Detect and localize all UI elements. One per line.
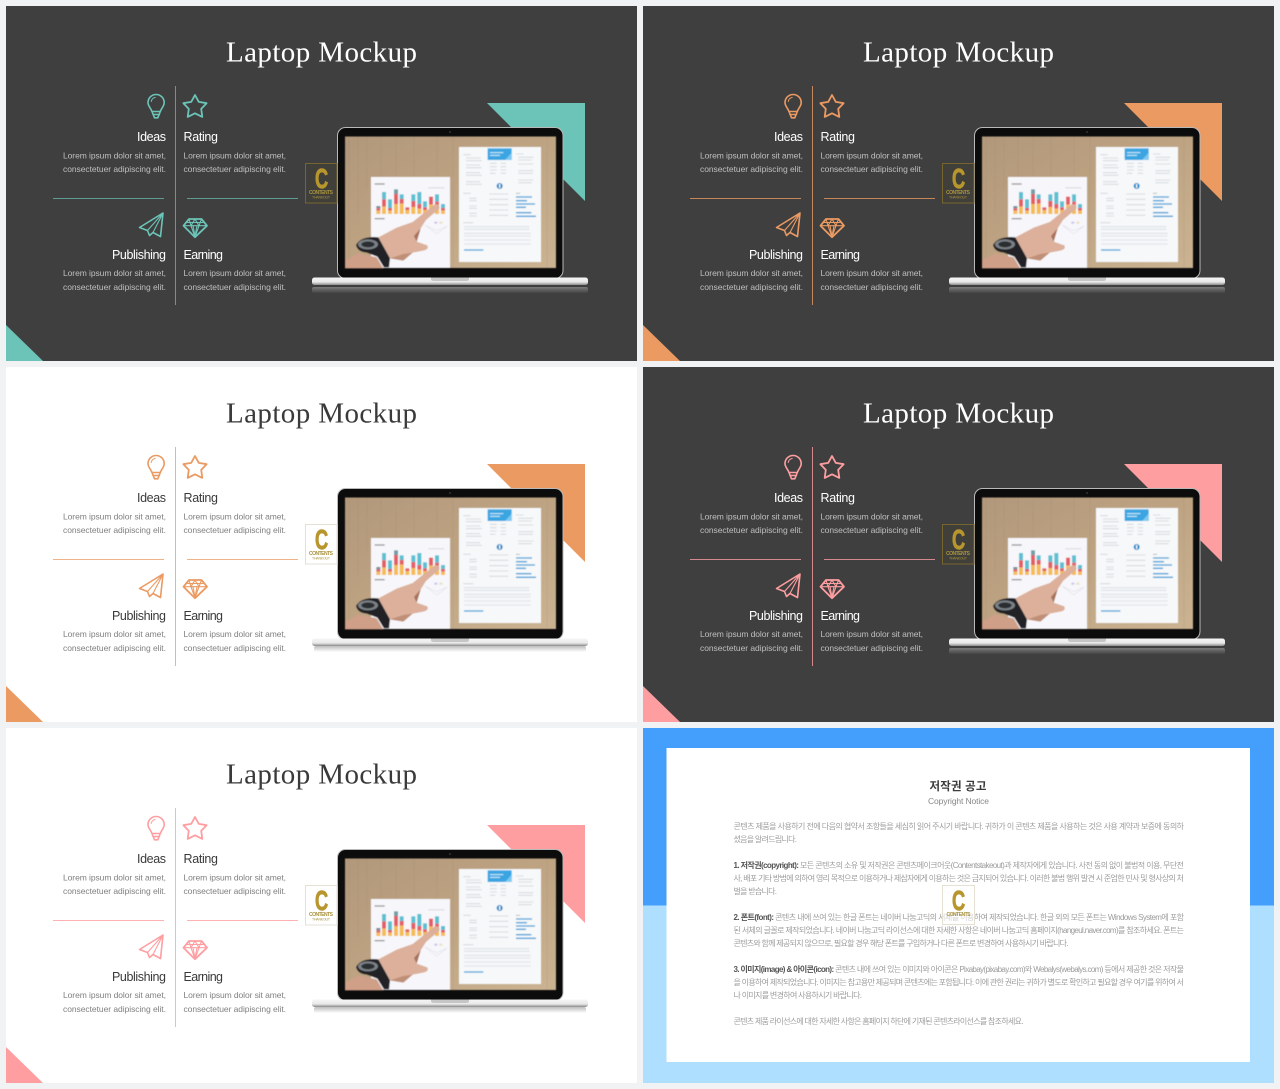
- icon: paper plane: [140, 574, 163, 598]
- notice section 3: image and icon: [734, 964, 1184, 1000]
- icon: star: [183, 456, 207, 478]
- logo badge: C: [952, 525, 965, 556]
- notice intro: 콘텐츠 제품을 사용하기 전에 다음의 협약서 조항들을 세심히 읽어 주시기 바랍니다. 귀하가 이 콘텐츠 제품을 사용하는 것은 사용 계약과 보증에 동의하: [734, 821, 1185, 831]
- logo badge: C: [952, 164, 965, 195]
- text block: Publishing: Lorem ipsum dolor sit amet,: [63, 268, 166, 278]
- title: Laptop Mockup: [226, 758, 417, 790]
- text block: Publishing: Publishing: [112, 970, 166, 984]
- panel: copyright notice slide: [643, 728, 1274, 1083]
- background triangle: [1124, 464, 1222, 562]
- notice closing line: 콘텐츠 제품 라이선스에 대한 자세한 사항은 홈페이지 하단에 기재된 콘텐츠라이선스를 참조하세요.: [734, 1016, 1024, 1026]
- text block: Ideas: [700, 130, 803, 174]
- logo badge: [942, 886, 974, 924]
- text block: Ideas: [700, 491, 803, 535]
- text block: Publishing: Lorem ipsum dolor sit amet,: [63, 629, 166, 639]
- text block: Publishing: [63, 970, 166, 1014]
- text block: Earning: [184, 609, 286, 653]
- text block: Publishing: Publishing: [112, 609, 166, 623]
- text block: Earning: consectetuer adipiscing elit.: [820, 282, 923, 292]
- text block: Rating: Rating: [820, 130, 855, 144]
- laptop with photo of charts and documents: [949, 488, 1225, 646]
- logo badge: CONTENTS: [946, 551, 971, 557]
- text block: Rating: [184, 852, 286, 896]
- text block: Publishing: [63, 248, 166, 292]
- text block: Ideas: Ideas: [774, 130, 803, 144]
- logo badge: THANKOUT: [949, 556, 968, 560]
- logo badge: THANKOUT: [312, 918, 331, 922]
- corner triangle: [6, 325, 43, 361]
- logo badge: [942, 164, 974, 203]
- icon: light bulb: [148, 94, 164, 118]
- divider lines: [690, 447, 935, 666]
- panel: laptop mockup slide, pink on white: [6, 728, 637, 1083]
- text block: Ideas: Lorem ipsum dolor sit amet,: [63, 872, 166, 882]
- icon: paper plane: [140, 213, 163, 236]
- notice section 2: font: [734, 912, 1185, 948]
- laptop with photo of charts and documents: [312, 128, 588, 285]
- logo badge: THANKOUT: [312, 196, 331, 200]
- logo badge: CONTENTS: [309, 190, 334, 196]
- title: Laptop Mockup: [863, 36, 1054, 68]
- notice subheading: Copyright Notice: [928, 796, 989, 806]
- notice section 1: copyright: 사, 배포 기타 방법에 의하여 영리 목적으로 이용하거나 제삼자에게 이용하는 것은 금지되어 있습니다. 이러한 불법 행위 발견 시 준엄한 민사 및 형사상의 처: [734, 873, 1184, 883]
- text block: Ideas: Ideas: [137, 491, 166, 505]
- logo badge: [306, 524, 337, 564]
- panel: laptop mockup slide, orange on dark: [643, 6, 1274, 361]
- text block: Earning: [184, 970, 286, 1014]
- corner triangle: [643, 686, 680, 722]
- text block: Earning: [184, 248, 286, 292]
- notice section 2: font: 콘텐츠와 함께 제공되지 않으므로, 필요할 경우 해당 폰트를 구입하거나 다른 폰트로 변경하여 사용하시기 바랍니다.: [734, 938, 1068, 948]
- text block: Publishing: consectetuer adipiscing elit.: [700, 643, 803, 653]
- icon: diamond: [184, 580, 207, 598]
- text block: Publishing: Publishing: [749, 609, 803, 623]
- notice section 1: copyright: 1. 저작권(copyright): 모든 콘텐츠의 소유 및 저작권은 콘텐츠메이크어웃(Contentstakeout)과 제작자에게 있습니다. 사전 동의 없이 불법적 이용, 무단전: [734, 860, 1184, 870]
- notice intro: 셨음을 알려드립니다.: [734, 834, 797, 844]
- text block: Rating: [184, 130, 286, 174]
- laptop reflection: [312, 287, 588, 293]
- text block: Ideas: [63, 130, 166, 174]
- text block: Rating: Lorem ipsum dolor sit amet,: [820, 150, 923, 160]
- laptop shadow: [314, 1007, 586, 1013]
- corner triangle: [6, 1047, 43, 1083]
- divider lines: [53, 86, 298, 305]
- icon: star: [183, 817, 207, 839]
- text block: Ideas: consectetuer adipiscing elit.: [700, 164, 803, 174]
- notice section 3: image and icon: 3. 이미지(image) & 아이콘(icon): 콘텐츠 내에 쓰여 있는 이미지와 아이콘은 Pixabay(pixabay.com)와 Webalys(webalys.com) 등에서 제공한 것은 저작물: [734, 964, 1184, 974]
- text block: Ideas: Lorem ipsum dolor sit amet,: [700, 150, 803, 160]
- text block: Earning: consectetuer adipiscing elit.: [184, 643, 286, 653]
- logo badge: [942, 524, 974, 564]
- text block: Earning: Earning: [184, 609, 223, 623]
- notice section 3: image and icon: 을 이용하여 제작되었습니다. 이미지는 참고용만 제공되며 콘텐츠에는 포함됩니다. 이에 관한 권리는 귀하가 별도로 확인하고 필요할 경우 여기를 위하여 서: [734, 977, 1184, 987]
- text block: Publishing: consectetuer adipiscing elit.: [63, 282, 166, 292]
- text block: Ideas: consectetuer adipiscing elit.: [700, 525, 803, 535]
- laptop reflection: [949, 648, 1225, 654]
- logo badge: C: [315, 886, 328, 917]
- text block: Rating: [184, 491, 286, 535]
- text block: Ideas: Ideas: [137, 852, 166, 866]
- icon: light bulb: [785, 94, 801, 118]
- text block: Rating: Rating: [820, 491, 855, 505]
- text block: Publishing: [700, 609, 803, 653]
- white notice card: [666, 748, 1250, 1062]
- notice section 2: font: 2. 폰트(font): 콘텐츠 내에 쓰여 있는 한글 폰트는 네이버 나눔고딕의 서체를 이용하여 제작되었습니다. 한글 외의 모든 폰트는 Windows System에 포함: [734, 912, 1185, 922]
- text block: Rating: [820, 491, 923, 535]
- text block: Publishing: Lorem ipsum dolor sit amet,: [63, 990, 166, 1000]
- text block: Earning: [820, 609, 923, 653]
- text block: Earning: [820, 248, 923, 292]
- text block: Earning: Lorem ipsum dolor sit amet,: [184, 990, 286, 1000]
- text block: Publishing: Publishing: [749, 248, 803, 262]
- text block: Rating: Lorem ipsum dolor sit amet,: [184, 512, 286, 522]
- logo badge: [306, 886, 337, 925]
- blue upper band: [643, 728, 1274, 906]
- text block: Rating: Lorem ipsum dolor sit amet,: [184, 150, 286, 160]
- background triangle: [487, 103, 585, 201]
- text block: Ideas: consectetuer adipiscing elit.: [63, 164, 166, 174]
- icon: diamond: [184, 941, 207, 959]
- notice intro: [734, 821, 1185, 844]
- text block: Earning: consectetuer adipiscing elit.: [184, 282, 286, 292]
- text block: Rating: consectetuer adipiscing elit.: [184, 164, 286, 174]
- panel: laptop mockup slide, teal on dark: [6, 6, 637, 361]
- text block: Publishing: consectetuer adipiscing elit.: [700, 282, 803, 292]
- text block: Rating: consectetuer adipiscing elit.: [820, 164, 923, 174]
- text block: Ideas: Lorem ipsum dolor sit amet,: [63, 512, 166, 522]
- text block: Rating: Rating: [184, 130, 218, 144]
- divider lines: [53, 447, 298, 666]
- laptop with photo of charts and documents: [312, 488, 588, 646]
- corner triangle: [643, 325, 680, 361]
- logo badge: CONTENTS: [309, 912, 334, 918]
- icon: paper plane: [776, 213, 800, 236]
- icon: diamond: [184, 219, 207, 237]
- text block: Rating: consectetuer adipiscing elit.: [184, 886, 286, 896]
- text block: Earning: Lorem ipsum dolor sit amet,: [184, 629, 286, 639]
- corner triangle: [6, 686, 43, 722]
- text block: Earning: consectetuer adipiscing elit.: [820, 643, 923, 653]
- notice section 3: image and icon: 나 이미지를 변경하여 사용하시기 바랍니다.: [734, 990, 862, 1000]
- text block: Publishing: consectetuer adipiscing elit.: [63, 643, 166, 653]
- text block: Earning: Earning: [184, 970, 223, 984]
- panel: laptop mockup slide, orange on white: [6, 367, 637, 722]
- text block: Ideas: Ideas: [137, 130, 166, 144]
- icon: diamond: [820, 219, 844, 237]
- logo badge: THANKOUT: [949, 196, 968, 200]
- text block: Ideas: [63, 852, 166, 896]
- text block: Ideas: Ideas: [774, 491, 803, 505]
- text block: Publishing: [700, 248, 803, 292]
- notice section 2: font: 된 서체의 글꼴로 제작되었습니다. 네이버 나눔고딕 라이선스에 대한 자세한 사항은 네이버 나눔고딕 홈페이지(hangeul.naver.com)를 참조하세요. 폰트는: [734, 925, 1184, 935]
- text block: Publishing: consectetuer adipiscing elit.: [63, 1004, 166, 1014]
- laptop with photo of charts and documents: [949, 128, 1225, 285]
- logo badge: CONTENTS: [946, 190, 971, 196]
- laptop with photo of charts and documents: [312, 850, 588, 1007]
- panel: laptop mockup slide, pink on dark: [643, 367, 1274, 722]
- icon: paper plane: [776, 574, 800, 598]
- notice section 1: copyright: 벌을 받습니다.: [734, 886, 777, 896]
- text block: Publishing: [63, 609, 166, 653]
- text block: Earning: Lorem ipsum dolor sit amet,: [184, 268, 286, 278]
- background triangle: [1124, 103, 1222, 201]
- title: Laptop Mockup: [226, 36, 417, 68]
- text block: Ideas: Lorem ipsum dolor sit amet,: [700, 512, 803, 522]
- logo badge: CONTENTS: [946, 912, 971, 918]
- logo badge: C: [315, 164, 328, 195]
- logo badge: CONTENTS: [309, 551, 334, 557]
- logo badge: C: [315, 525, 328, 556]
- logo badge: THANKOUT: [312, 556, 331, 560]
- background triangle: [487, 464, 585, 562]
- text block: Publishing: Lorem ipsum dolor sit amet,: [700, 268, 803, 278]
- text block: Earning: Earning: [820, 248, 860, 262]
- icon: light bulb: [148, 816, 164, 840]
- text block: Earning: Lorem ipsum dolor sit amet,: [820, 268, 923, 278]
- icon: light bulb: [148, 455, 164, 479]
- text block: Rating: consectetuer adipiscing elit.: [820, 525, 923, 535]
- text block: Rating: consectetuer adipiscing elit.: [184, 525, 286, 535]
- notice section 1: copyright: [734, 860, 1184, 896]
- text block: Ideas: consectetuer adipiscing elit.: [63, 886, 166, 896]
- icon: paper plane: [140, 935, 163, 958]
- text block: Ideas: Lorem ipsum dolor sit amet,: [63, 150, 166, 160]
- text block: Earning: Earning: [184, 248, 223, 262]
- text block: Rating: Rating: [184, 852, 218, 866]
- text block: Earning: Lorem ipsum dolor sit amet,: [820, 629, 923, 639]
- text block: Publishing: Publishing: [112, 248, 166, 262]
- background triangle: [487, 825, 585, 923]
- icon: star: [820, 95, 844, 117]
- icon: star: [820, 456, 844, 478]
- logo badge: C: [952, 886, 965, 917]
- text block: Rating: Lorem ipsum dolor sit amet,: [820, 512, 923, 522]
- text block: Earning: consectetuer adipiscing elit.: [184, 1004, 286, 1014]
- text block: Rating: Lorem ipsum dolor sit amet,: [184, 872, 286, 882]
- title: Laptop Mockup: [226, 398, 417, 430]
- text block: Earning: Earning: [820, 609, 860, 623]
- text block: Publishing: Lorem ipsum dolor sit amet,: [700, 629, 803, 639]
- divider lines: [53, 808, 298, 1027]
- logo badge: [306, 164, 337, 203]
- text block: Ideas: consectetuer adipiscing elit.: [63, 525, 166, 535]
- laptop reflection: [949, 287, 1225, 293]
- icon: star: [183, 95, 207, 117]
- icon: diamond: [820, 580, 844, 598]
- icon: light bulb: [785, 455, 801, 479]
- divider lines: [690, 86, 935, 305]
- notice heading: 저작권 공고: [930, 779, 987, 793]
- text block: Ideas: [63, 491, 166, 535]
- text block: Rating: Rating: [184, 491, 218, 505]
- laptop shadow: [314, 646, 586, 652]
- text block: Rating: [820, 130, 923, 174]
- title: Laptop Mockup: [863, 398, 1054, 430]
